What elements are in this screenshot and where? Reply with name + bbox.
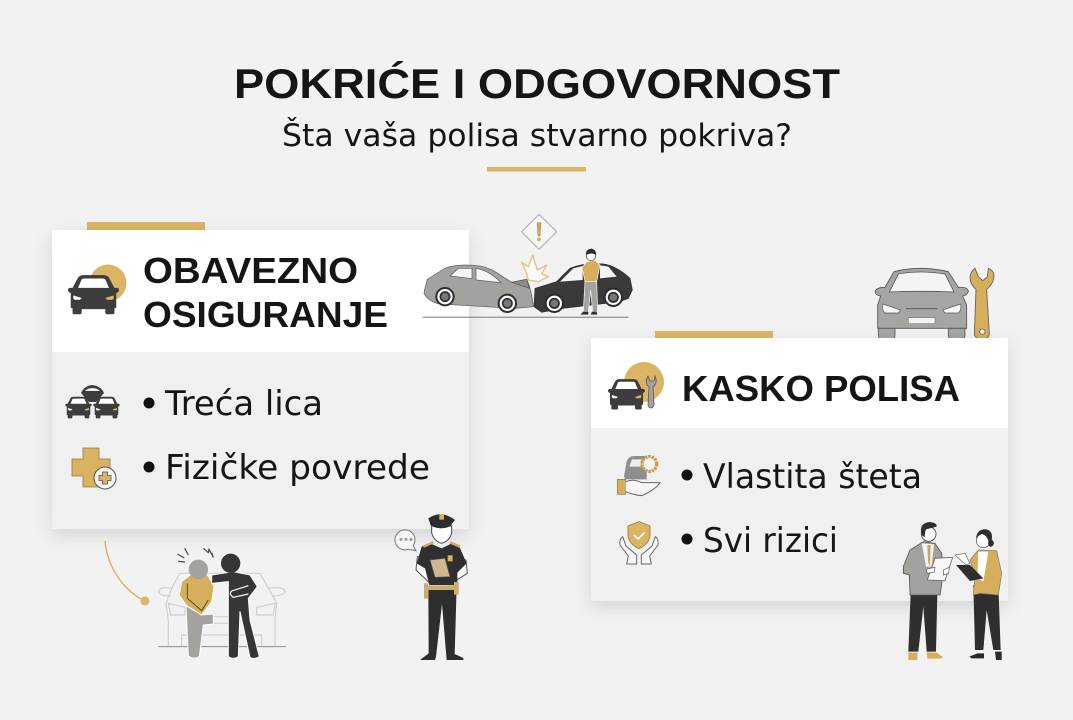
illustration: grey car and wrench bbox=[875, 268, 994, 339]
heading: obavezno osiguranje bbox=[143, 250, 388, 335]
list item: svi rizici: Svi rizici bbox=[703, 521, 838, 561]
impact marks bbox=[177, 548, 213, 562]
epaulettes bbox=[423, 542, 460, 547]
icon: medical cross bbox=[72, 448, 116, 489]
heading: obavezno osiguranje: OSIGURANJE bbox=[143, 294, 388, 335]
panel: kasko polisa bbox=[591, 331, 1008, 601]
crash burst bbox=[522, 255, 548, 282]
car outline bbox=[159, 573, 285, 647]
illustration: injured person helped bbox=[158, 548, 286, 659]
woman bbox=[955, 529, 1002, 660]
face bbox=[432, 526, 452, 543]
list item: vlastita steta: Vlastita šteta bbox=[703, 457, 922, 497]
injured figure bbox=[179, 560, 214, 658]
man bbox=[903, 522, 953, 660]
panel body bbox=[52, 230, 469, 529]
illustration: car collision bbox=[423, 214, 632, 318]
icon: shield in hands bbox=[620, 522, 658, 564]
arrow: connector to injured figures bbox=[105, 541, 150, 606]
arms bbox=[416, 557, 467, 583]
ground line bbox=[158, 646, 286, 647]
illustration: agent and client bbox=[903, 522, 1002, 660]
heading: obavezno osiguranje: OBAVEZNO bbox=[143, 250, 358, 291]
icon: car, wrench and gold circle bbox=[608, 362, 664, 410]
heading: kasko polisa: KASKO POLISA bbox=[682, 368, 960, 409]
icon: car with gold circle bbox=[68, 264, 126, 314]
title accent bar bbox=[487, 167, 586, 172]
ground line bbox=[423, 317, 628, 318]
helper figure bbox=[212, 554, 259, 659]
icon: three cars bbox=[65, 385, 120, 418]
police cap bbox=[428, 514, 455, 528]
list item: fizicke povrede: Fizičke povrede bbox=[165, 448, 430, 488]
icon: car, gear and hand bbox=[617, 456, 660, 496]
badge bbox=[448, 555, 453, 561]
legs and shoes bbox=[420, 587, 463, 660]
wrench bbox=[970, 268, 994, 339]
illustration: police officer bbox=[395, 514, 467, 660]
panel accent tab bbox=[87, 222, 205, 230]
panel header background bbox=[591, 338, 1008, 428]
grey car front bbox=[875, 268, 968, 339]
black car bbox=[534, 264, 632, 312]
grey car bbox=[424, 265, 533, 312]
subtitle: Šta vaša polisa stvarno pokriva? bbox=[282, 117, 792, 154]
man on phone bbox=[580, 249, 600, 315]
torso bbox=[417, 543, 467, 585]
panel body bbox=[591, 338, 1008, 601]
title: POKRIĆE I ODGOVORNOST bbox=[234, 59, 840, 107]
list item: treca lica: Treća lica bbox=[164, 384, 323, 424]
warning sign bbox=[522, 214, 557, 249]
panel header background bbox=[52, 230, 469, 352]
panel: obavezno osiguranje bbox=[52, 222, 469, 529]
panel accent tab bbox=[655, 331, 773, 338]
belt bbox=[427, 585, 459, 590]
speech bubble bbox=[395, 530, 416, 551]
clipboard bbox=[430, 558, 450, 577]
